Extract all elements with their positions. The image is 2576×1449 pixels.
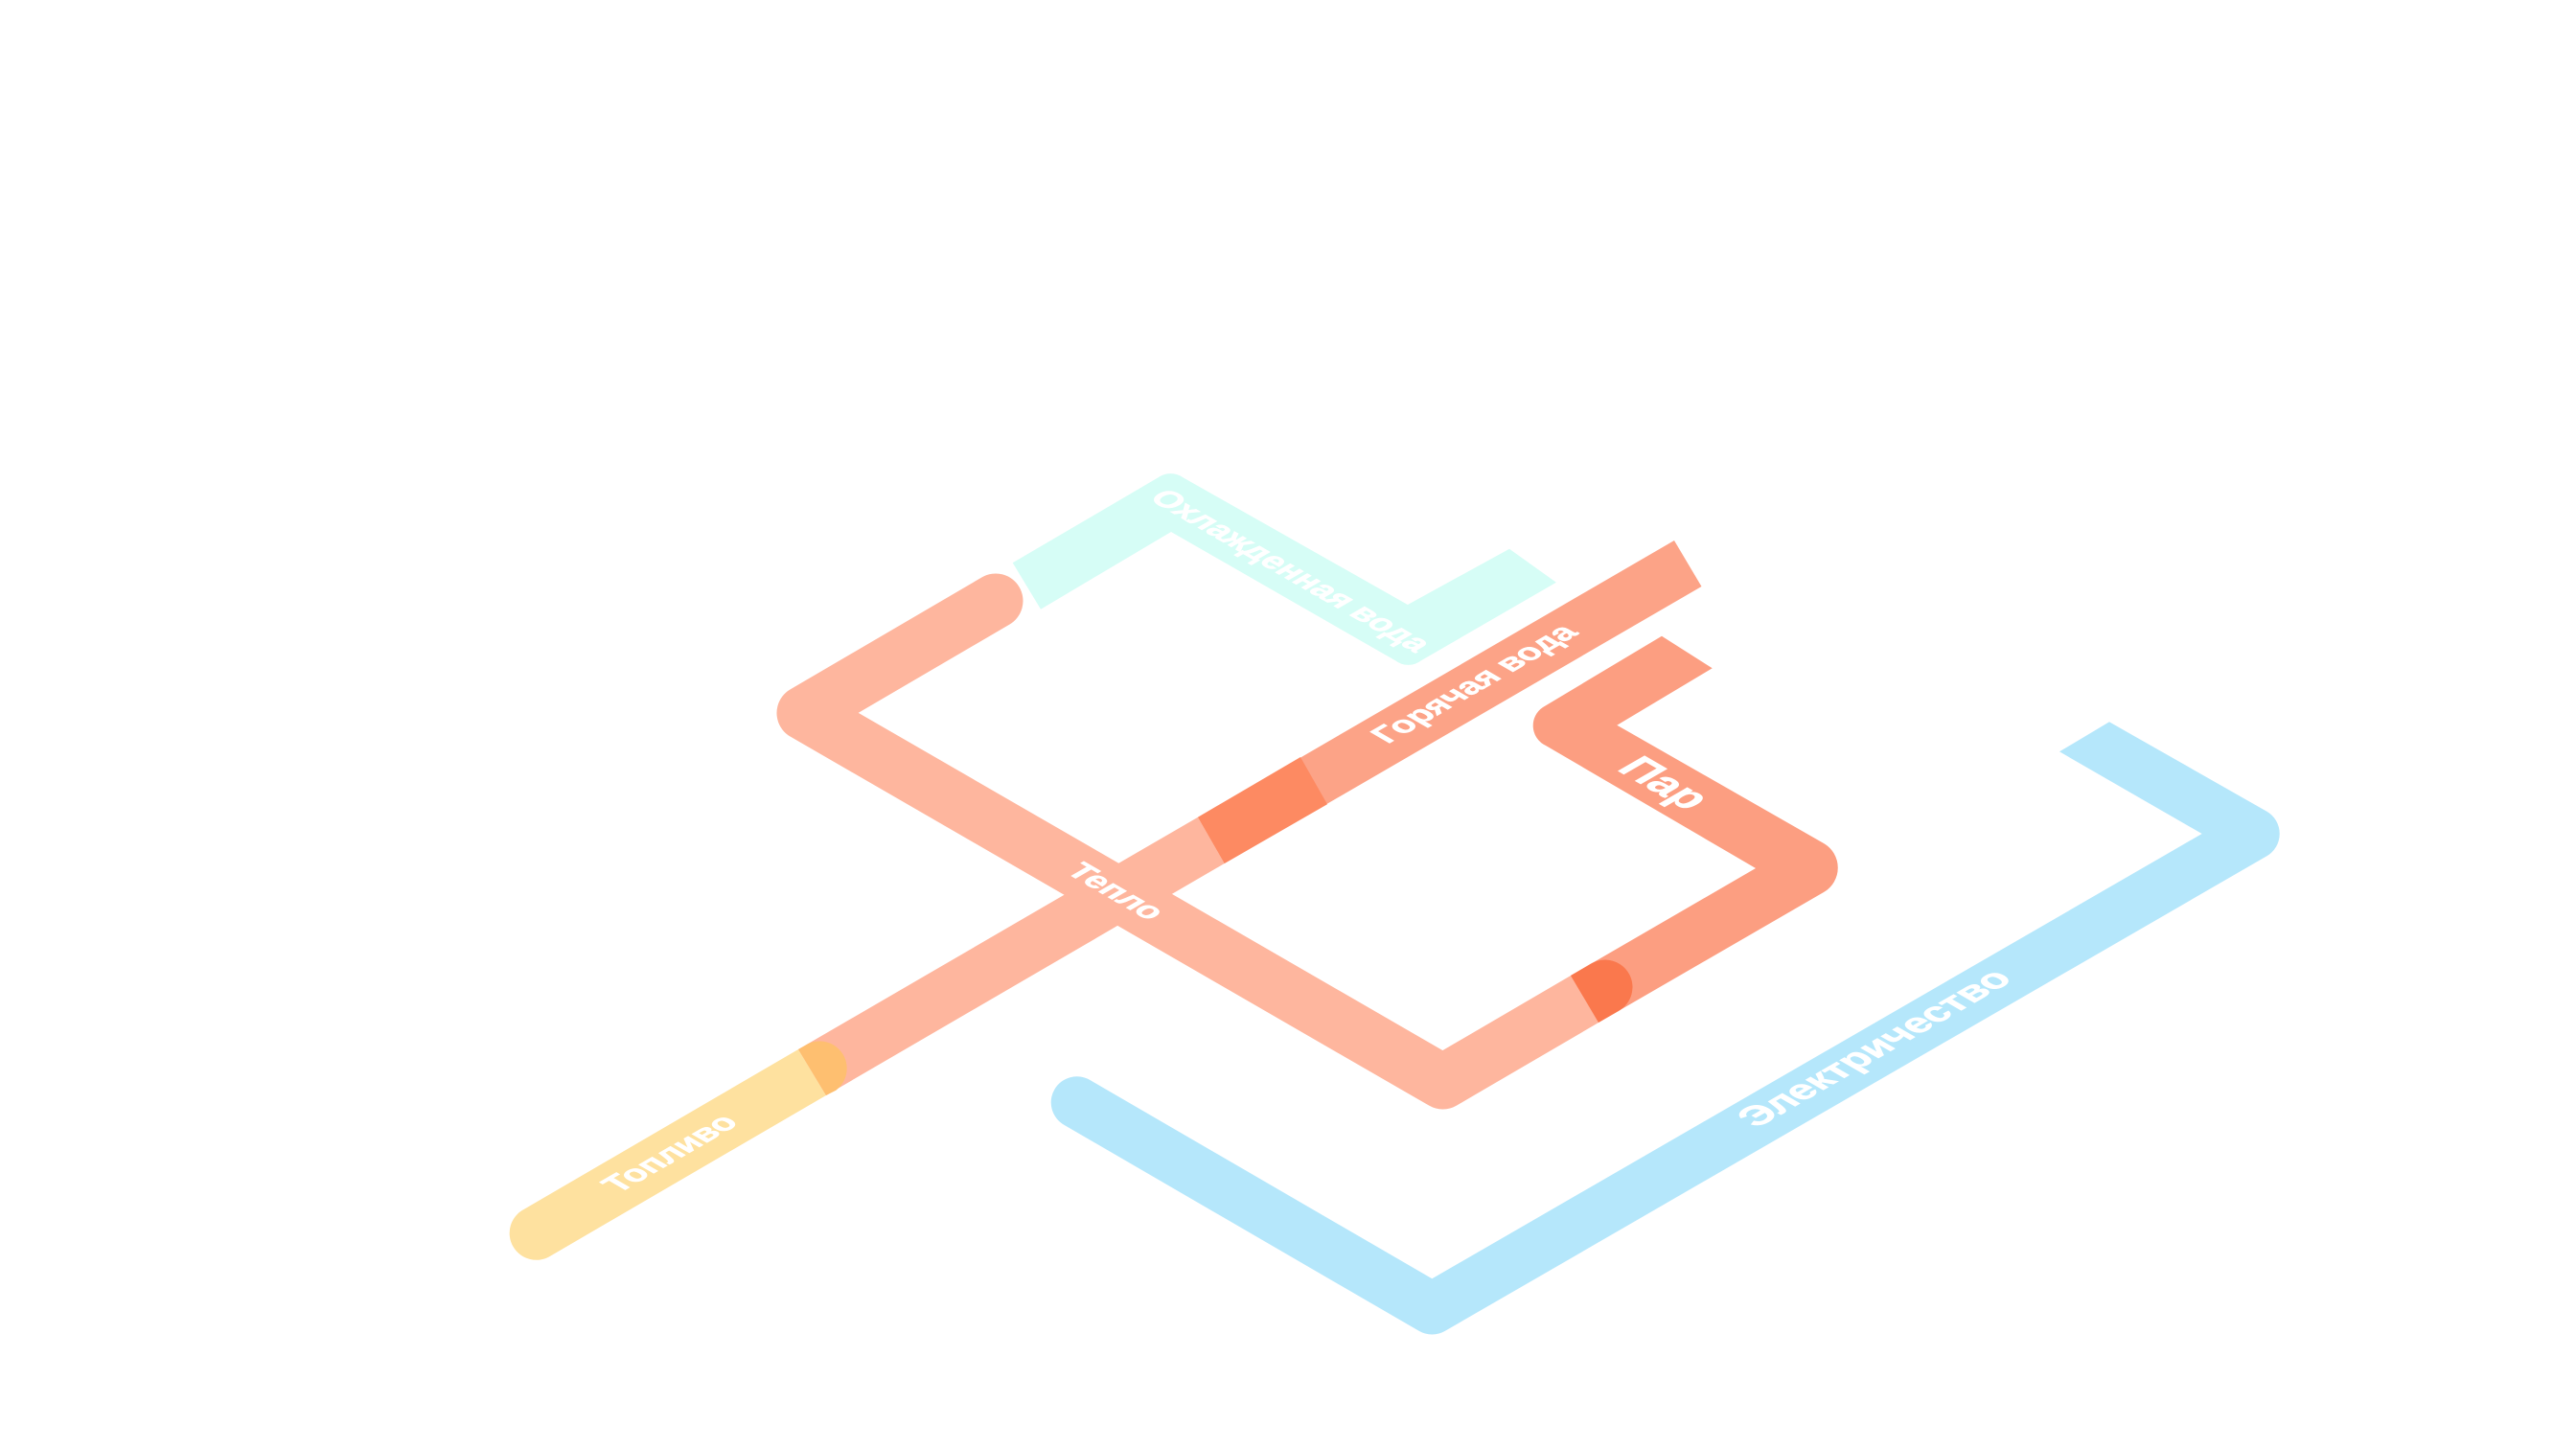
overlap: heat into hot water (1198, 757, 1327, 863)
label: heat: Тепло (1059, 858, 1174, 925)
label: electricity: Электричество (1728, 963, 2021, 1133)
overlap: heat into steam (1571, 959, 1633, 1023)
flow: steam (1533, 636, 1838, 1023)
label: steam: Пар (1607, 749, 1723, 816)
flow: electricity (1051, 722, 2280, 1335)
flow: hot water (1198, 540, 1702, 863)
label: chilled water: Охлажденная вода (1141, 484, 1441, 657)
flow: chilled water (1013, 473, 1556, 665)
overlap: fuel into heat (798, 1041, 847, 1095)
label: hot water: Горячая вода (1363, 618, 1587, 748)
flow: fuel (510, 1049, 826, 1260)
flow: heat (798, 601, 1605, 1095)
label: fuel: Топливо (594, 1109, 747, 1198)
